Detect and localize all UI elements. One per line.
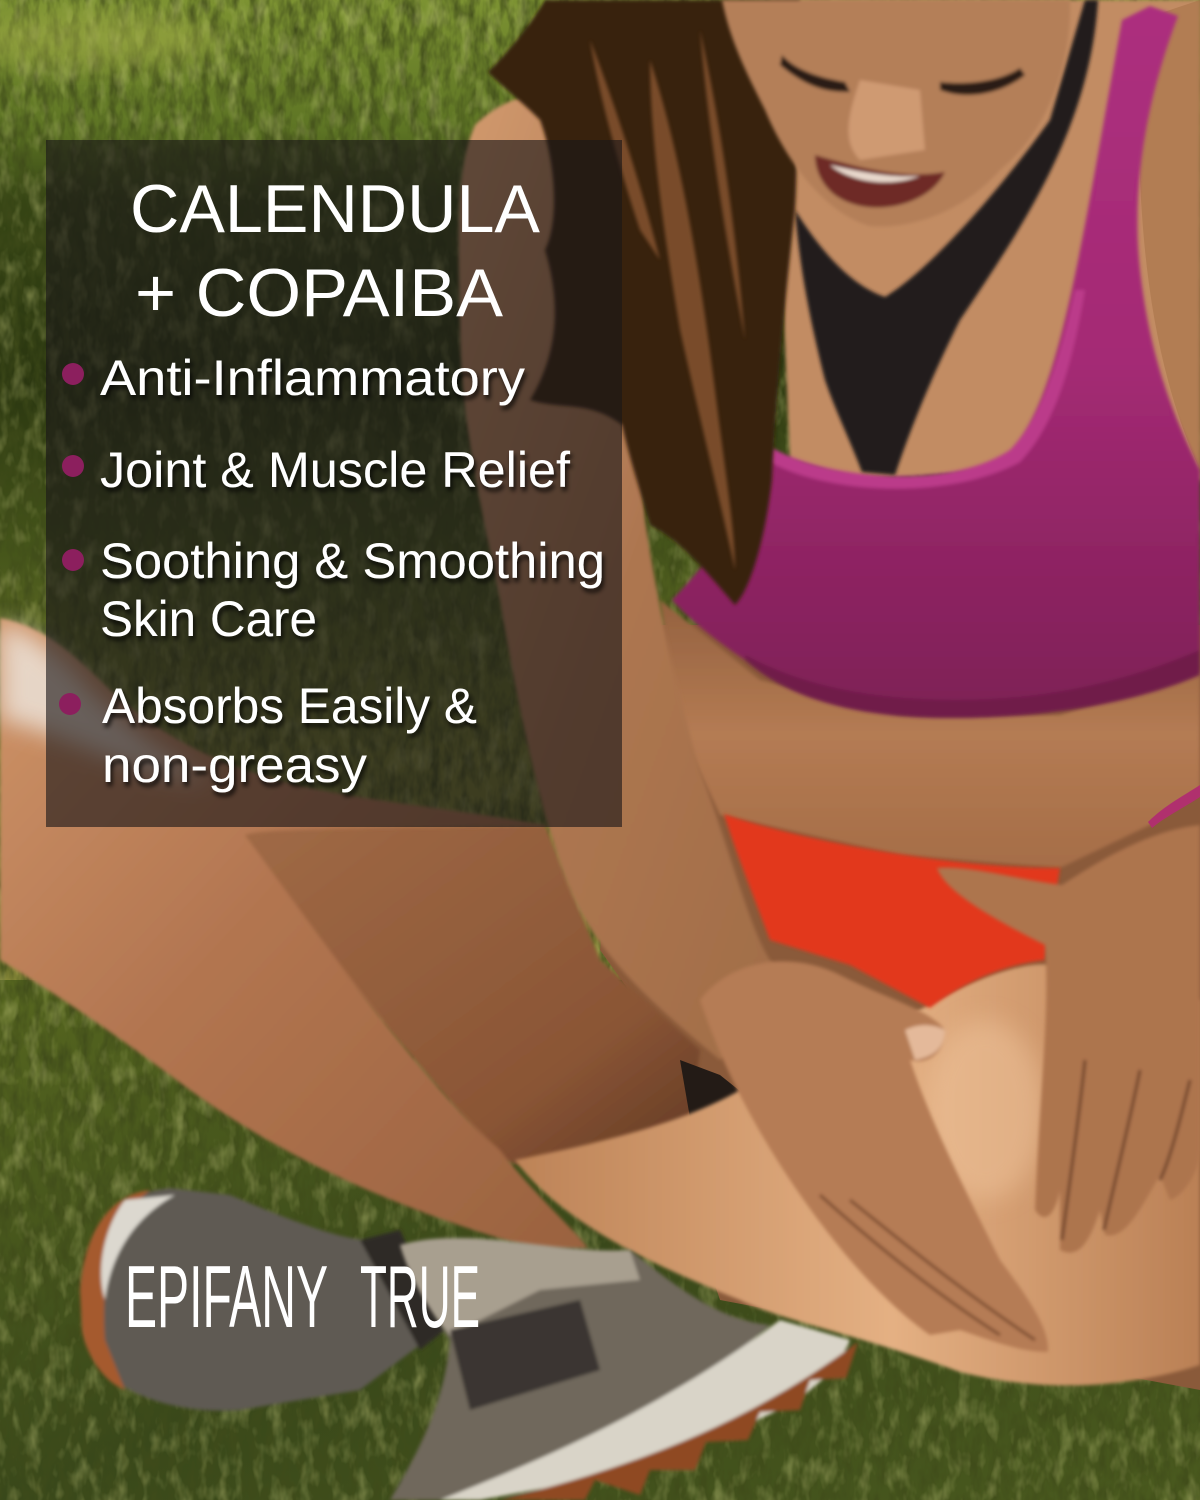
right thigh and knee bbox=[515, 964, 1200, 1386]
red briefs bbox=[724, 814, 1060, 1008]
bullet: anti-inflammatory: Anti-Inflammatory bbox=[100, 350, 525, 406]
hair highlights bbox=[590, 30, 745, 570]
wristband bbox=[1148, 785, 1200, 828]
logo: Epifany True: TRUE bbox=[360, 1247, 480, 1346]
shaded chest side bbox=[1139, 0, 1200, 470]
heading bbox=[130, 171, 541, 331]
torso: chest skin bbox=[770, 0, 1200, 480]
arm and shoulder bbox=[459, 94, 800, 1060]
belly bbox=[660, 600, 1200, 868]
sock gap behind knee bbox=[680, 1060, 745, 1118]
bullet: absorbs easily and non-greasy: Absorbs Easily & bbox=[102, 678, 477, 734]
hair bbox=[488, 0, 800, 605]
heading: + COPAIBA bbox=[135, 255, 504, 331]
logo: Epifany True: EPIFANY bbox=[125, 1247, 328, 1346]
bullet: soothing and smoothing skin care: Soothing & Smoothing bbox=[100, 533, 605, 589]
heading: CALENDULA bbox=[130, 171, 541, 247]
bullet: absorbs easily and non-greasy: non-greasy bbox=[102, 737, 367, 793]
bullet: joint and muscle relief: Joint & Muscle Relief bbox=[100, 442, 570, 498]
calf under the thigh bbox=[230, 825, 700, 1175]
bullet: absorbs easily and non-greasy bbox=[59, 678, 477, 793]
magenta sports bra bbox=[672, 6, 1200, 718]
dark panel bbox=[46, 140, 622, 827]
bullet: soothing and smoothing skin care: Skin Care bbox=[100, 591, 317, 647]
left hand on knee bbox=[700, 961, 1048, 1352]
bullet: soothing and smoothing skin care bbox=[62, 533, 605, 647]
right shoe bbox=[390, 1238, 858, 1500]
left shoe bbox=[80, 1188, 445, 1411]
shadowed body base behind limbs bbox=[600, 625, 1200, 1390]
face bbox=[722, 0, 1070, 226]
black mesh top bbox=[795, 0, 1098, 475]
left leg and shin bbox=[0, 618, 588, 1250]
right hand on knee bbox=[937, 825, 1200, 1253]
